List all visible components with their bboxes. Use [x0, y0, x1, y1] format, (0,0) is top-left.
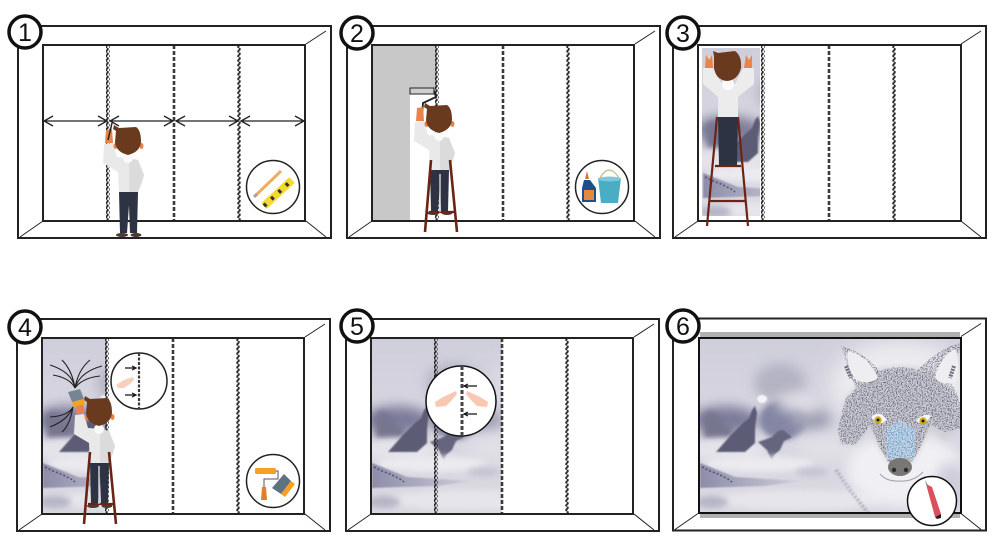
- panel 4: smooth the strip: [9, 311, 330, 531]
- step number 6: 6: [676, 313, 690, 341]
- icon: glue bottle and bucket: [576, 160, 628, 214]
- zoom circle: seam alignment: [111, 353, 167, 409]
- step number 3: [667, 17, 699, 49]
- step number 4: 4: [18, 314, 32, 342]
- icon: pencil and spirit level: [246, 160, 300, 214]
- smoothing direction arrows: [50, 360, 102, 432]
- person marking the wall: [103, 123, 144, 237]
- icon: roller and scraper: [246, 454, 300, 508]
- panel 6: finished mural: [667, 310, 986, 530]
- excess wallpaper strips: [700, 332, 960, 518]
- wallpaper strips: [372, 339, 502, 513]
- pasted wall area: [373, 46, 437, 220]
- person on ladder pasting: [414, 103, 457, 232]
- step number 2: [341, 17, 373, 49]
- person on ladder with smoothing brush: [68, 389, 116, 524]
- paint roller: [410, 88, 436, 115]
- step number 5: 5: [350, 313, 364, 341]
- panel 3: hang the first strip: [667, 17, 986, 238]
- step number 4: [9, 311, 41, 343]
- finished wolf mural: [685, 338, 970, 513]
- width measurement arrows: [44, 116, 304, 126]
- icon: utility knife: [908, 476, 956, 526]
- panel 1: measure and mark the wall: [9, 16, 331, 238]
- wallpaper strip: [43, 339, 107, 513]
- step number 1: 1: [18, 19, 32, 47]
- panel 5: butt the next strip: [341, 310, 659, 531]
- wallpaper strip: [702, 48, 760, 216]
- panel 2: apply paste: [341, 17, 660, 238]
- person on ladder holding strip: [703, 51, 754, 226]
- step number 6: [667, 310, 699, 342]
- step number 3: 3: [676, 20, 690, 48]
- zoom circle: butting seam with hands: [426, 366, 496, 436]
- step number 1: [9, 16, 41, 48]
- step number 5: [341, 310, 373, 342]
- step number 2: 2: [350, 20, 364, 48]
